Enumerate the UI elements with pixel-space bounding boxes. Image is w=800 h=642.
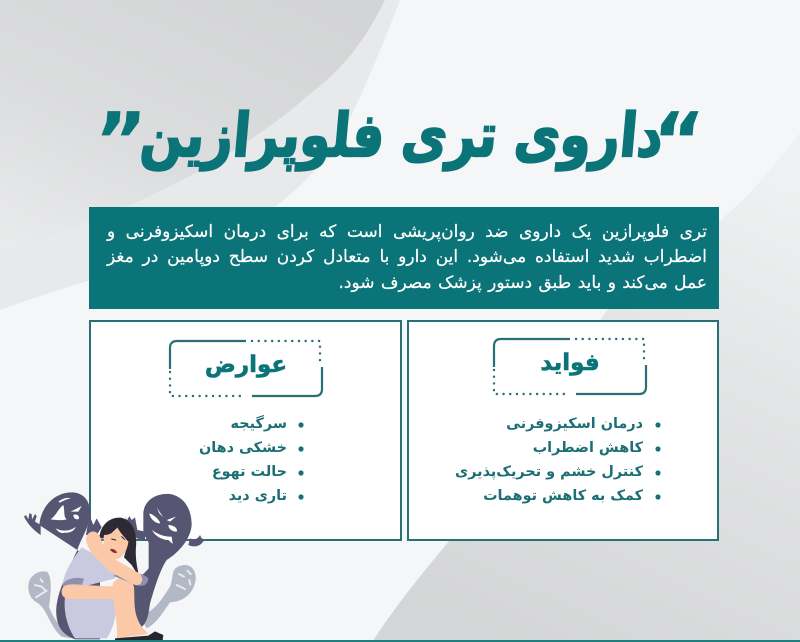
list: benefits: کاهش اضطراب (533, 440, 643, 456)
title (90, 96, 707, 187)
list: side effects (199, 414, 304, 504)
dark ghost left (24, 492, 102, 639)
intro line 1: تری فلوپرازین یک داروی ضد روان‌پریشی است که برای درمان اسکیزوفرنی و (107, 222, 707, 242)
title: “ (648, 96, 707, 187)
heading: benefits (492, 338, 648, 396)
heading: benefits: فواید (540, 350, 600, 376)
panel: side effects (89, 320, 402, 541)
list: benefits: کمک به کاهش توهمات (483, 488, 643, 504)
list: benefits: درمان اسکیزوفرنی (506, 416, 643, 432)
girl (62, 518, 163, 640)
title: ” (90, 96, 149, 187)
small ghost right (140, 565, 196, 628)
heading: side effects: عوارض (205, 352, 287, 378)
list: benefits (455, 416, 661, 504)
intro line 2: اضطراب شدید استفاده می‌شود. این دارو با متعادل کردن سطح دوپامین در مغز (107, 247, 707, 267)
list: side effects: سرگیجه (231, 416, 287, 432)
list: side effects: حالت تهوع (212, 464, 287, 480)
dark ghost right (125, 494, 205, 630)
heading: side effects (168, 340, 324, 398)
panel: benefits (407, 320, 719, 541)
list: side effects: تاری دید (229, 488, 287, 504)
small ghost left (28, 571, 72, 638)
intro text panel (89, 207, 719, 309)
list: side effects: خشکی دهان (199, 440, 287, 456)
list: benefits: کنترل خشم و تحریک‌پذیری (455, 464, 643, 480)
illustration: frightened girl with shadow ghosts (24, 492, 205, 640)
intro line 3: عمل می‌کند و باید طبق دستور پزشک مصرف شود. (339, 273, 707, 293)
